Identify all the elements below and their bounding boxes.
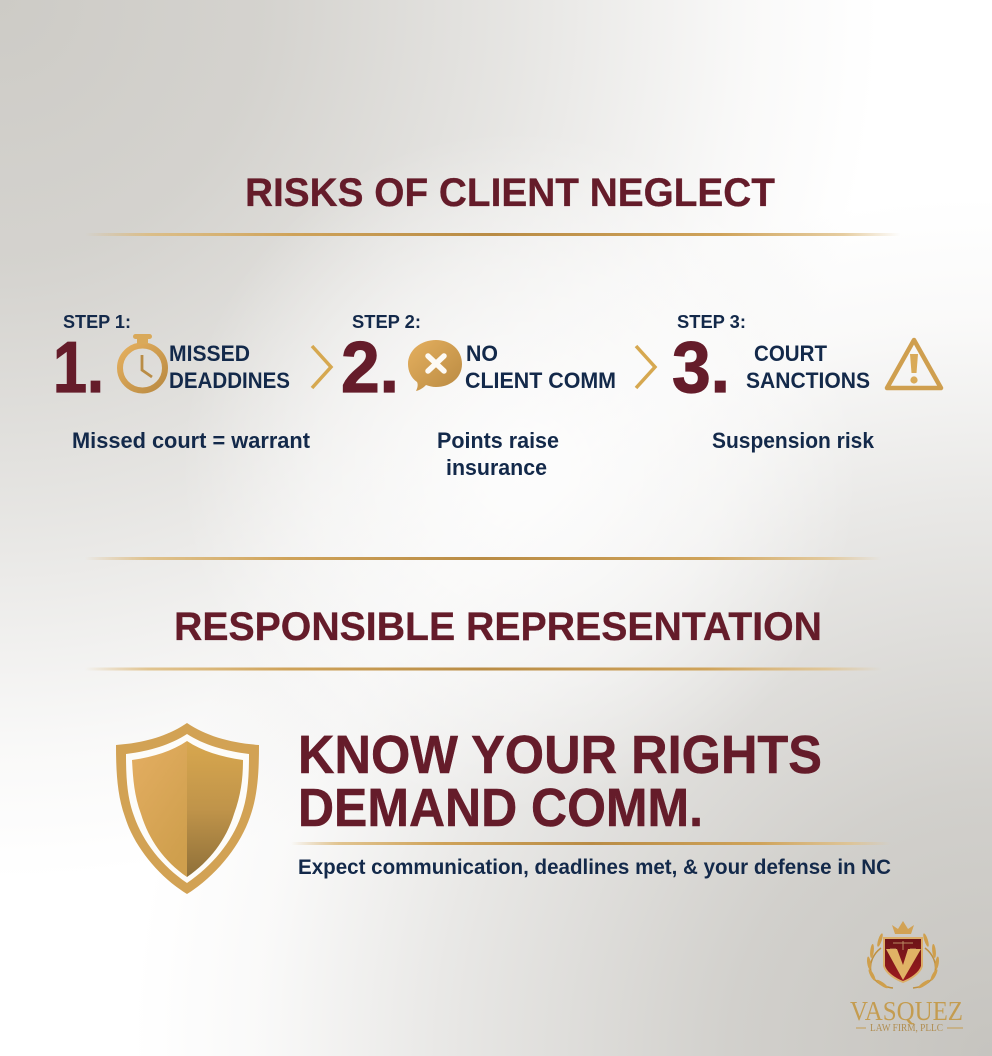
- step 1 label: STEP 1:: [63, 312, 131, 332]
- step 2 label: STEP 2:: [352, 312, 421, 332]
- step 1 description: Missed court = warrant: [72, 428, 311, 453]
- logo tagline: LAW FIRM, PLLC: [870, 1023, 943, 1034]
- logo crown: [892, 921, 914, 934]
- step 1 title: MISSED: [169, 341, 250, 366]
- heading: responsible representation: RESPONSIBLE REPRESENTATION: [174, 605, 822, 649]
- logo laurel: [866, 933, 940, 989]
- step 2 description: insurance: [446, 455, 547, 480]
- icon: warning triangle: [887, 340, 941, 388]
- callout headline: DEMAND COMM.: [298, 778, 703, 838]
- step 3 description: Suspension risk: [712, 428, 875, 453]
- step 3 label: STEP 3:: [677, 312, 746, 332]
- heading: risks of client neglect: RISKS OF CLIENT NEGLECT: [245, 171, 775, 215]
- icon: stopwatch: [120, 334, 165, 390]
- step 1 number: 1.: [53, 328, 104, 408]
- step 3: [672, 312, 941, 453]
- step 3 title: COURT: [754, 341, 828, 366]
- logo scales: [890, 941, 916, 950]
- logo V: [886, 949, 921, 980]
- step 2 number: 2.: [341, 328, 399, 408]
- logo wordmark: VASQUEZ: [850, 996, 963, 1026]
- step 2: [341, 312, 616, 480]
- step 3 title: SANCTIONS: [746, 368, 870, 393]
- callout headline: KNOW YOUR RIGHTS: [298, 725, 822, 785]
- step 3 number: 3.: [672, 328, 730, 408]
- callout: know your rights: [291, 725, 891, 879]
- step 1: [53, 312, 311, 453]
- logo: vasquez law firm: [850, 921, 963, 1034]
- step 1 title: DEADDINES: [169, 368, 290, 393]
- arrow 2: [636, 346, 655, 388]
- step 2 title: NO: [466, 341, 498, 366]
- icon: shield: [116, 723, 259, 894]
- callout subtext: Expect communication, deadlines met, & your defense in NC: [298, 856, 891, 879]
- icon: speech bubble with x: [408, 340, 462, 391]
- arrow 1: [312, 346, 331, 388]
- step 2 title: CLIENT COMM: [465, 368, 616, 393]
- step 2 description: Points raise: [437, 428, 559, 453]
- logo crest: [884, 938, 922, 982]
